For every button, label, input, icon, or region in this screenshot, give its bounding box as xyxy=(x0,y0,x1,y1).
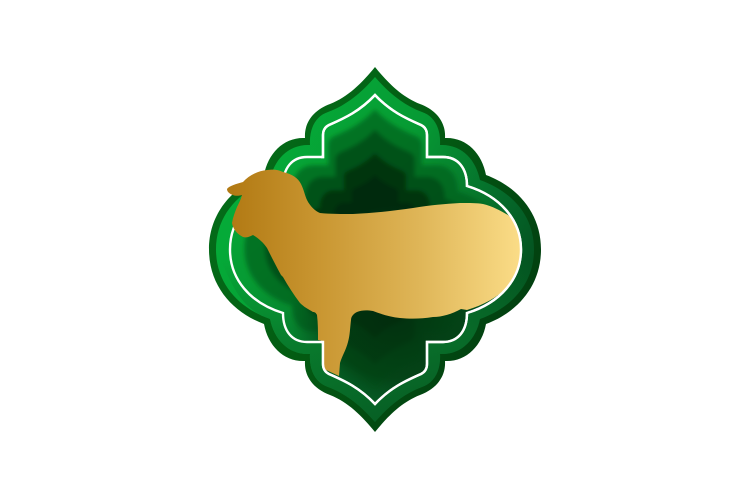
badge outer dark ring xyxy=(209,67,541,432)
emblem: sheep on green arabesque badge xyxy=(208,67,541,432)
badge green middle band xyxy=(216,77,534,422)
white outline of inner panel xyxy=(230,95,521,404)
sheep silhouette in gold xyxy=(227,170,522,376)
dark shading below the sheep xyxy=(230,95,521,404)
badge inner panel xyxy=(230,95,521,404)
white outline over sheep's right side xyxy=(321,93,522,406)
stepped dark shading inside panel xyxy=(245,109,506,388)
